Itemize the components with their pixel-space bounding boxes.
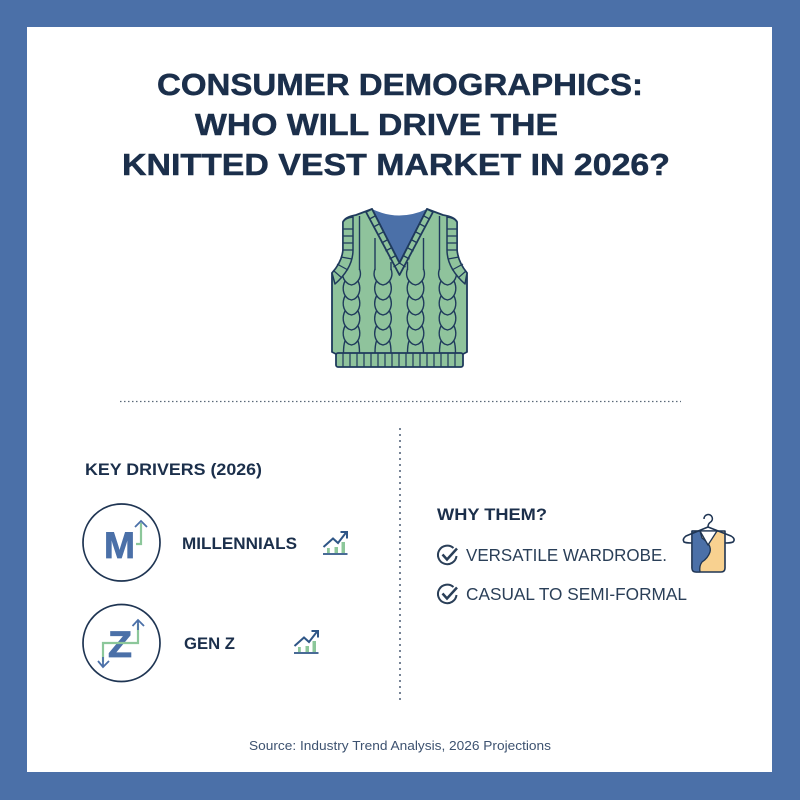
vest arm ribs [332,217,467,284]
icon: vest on hanger [683,515,734,572]
title: CONSUMER DEMOGRAPHICS: [157,67,643,102]
vest hem [336,353,463,367]
title [122,67,670,182]
vest body [332,209,467,354]
vest neck opening [372,209,427,268]
icon: growth chart [294,631,318,653]
icon: knitted vest [332,209,467,367]
label: millennials: MILLENNIALS [182,535,297,553]
icon: growth chart [323,532,348,554]
vest cable lines [360,216,440,270]
vest neck rib [366,209,433,275]
icon: check [438,585,457,603]
icon: Z badge [83,604,160,682]
label: gen z: GEN Z [184,635,235,653]
driver: gen z [83,604,318,682]
icon: M badge [83,504,160,581]
title: KNITTED VEST MARKET IN 2026? [122,147,670,182]
reason: casual to semi-formal: CASUAL TO SEMI-FORMAL [466,584,687,604]
title: WHO WILL DRIVE THE [195,107,558,142]
icon: Z badge: Z [108,624,132,665]
driver: millennials [83,504,348,581]
heading: why them: WHY THEM? [437,506,547,524]
reason: versatile wardrobe: VERSATILE WARDROBE. [466,545,667,565]
icon: check [438,546,457,564]
heading: key drivers: KEY DRIVERS (2026) [85,460,262,479]
icon: M badge: M [104,525,135,566]
source note: Source: Industry Trend Analysis, 2026 Projections [249,739,551,753]
